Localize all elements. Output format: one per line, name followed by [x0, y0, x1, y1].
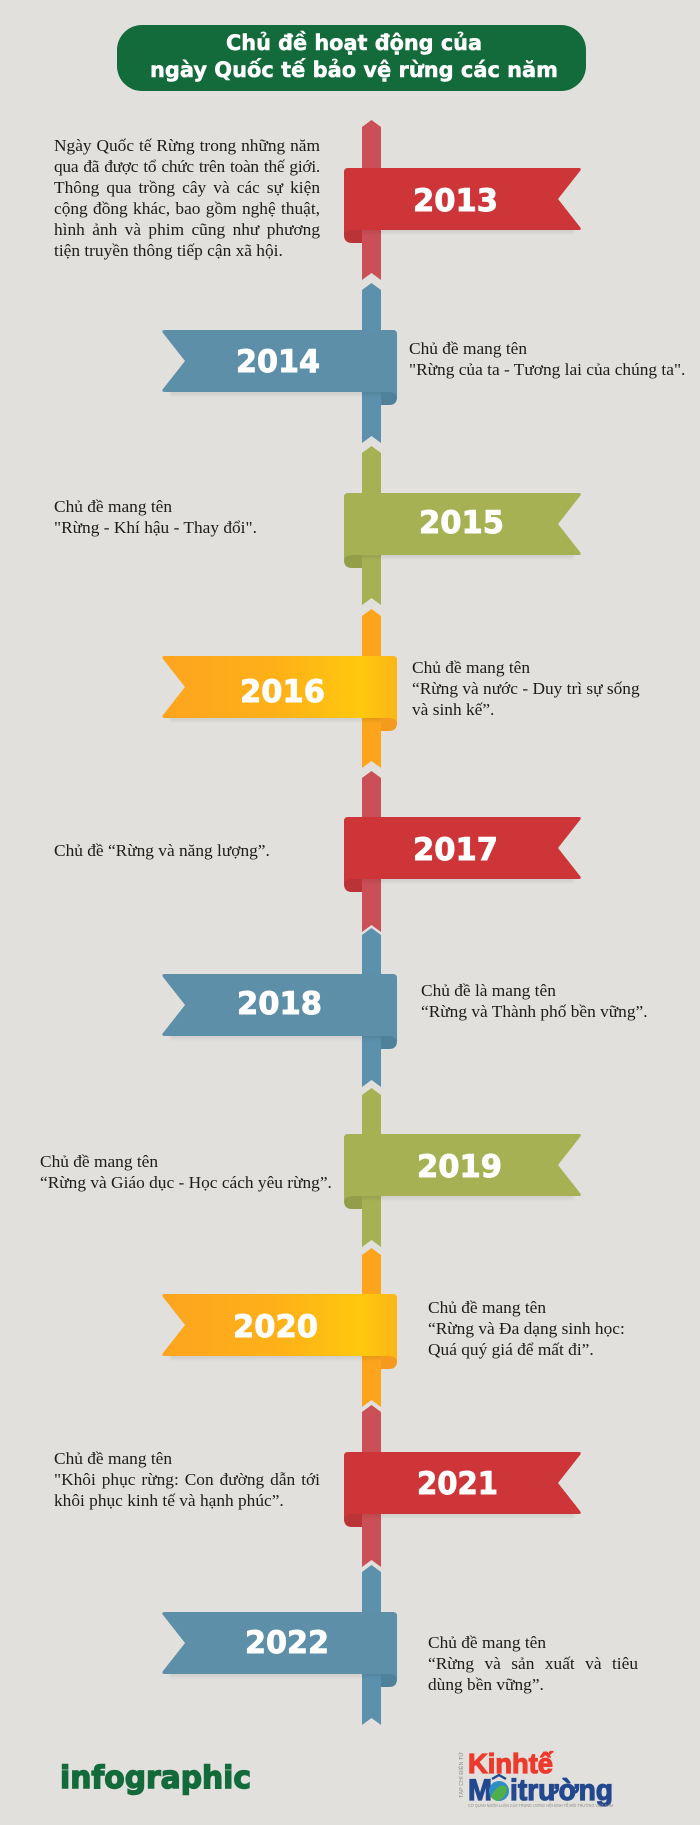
ribbon 2015: [344, 446, 581, 605]
text: theme 2022: Chủ đề mang tên: [428, 1633, 546, 1652]
text: introduction: Ngày Quốc tế Rừng trong những năm: [54, 136, 320, 155]
text: theme 2021: Chủ đề mang tên: [54, 1449, 172, 1468]
title banner: ngày Quốc tế bảo vệ rừng các năm: [150, 58, 558, 82]
logo: Kinh tế Môi trường: itrường: [510, 1774, 613, 1807]
ribbon 2013: [344, 120, 581, 280]
text: theme 2022: [428, 1633, 638, 1694]
logo: Kinh tế Môi trường: [457, 1748, 613, 1808]
text: theme 2017: Chủ đề “Rừng và năng lượng”.: [54, 841, 270, 860]
text: theme 2021: khôi phục kinh tế và hạnh phúc”.: [54, 1491, 284, 1510]
ribbon 2022: 2022: [245, 1625, 329, 1661]
text: theme 2019: [40, 1152, 332, 1192]
infographic wordmark: infographic: [60, 1760, 251, 1796]
ribbon 2020: 2020: [233, 1309, 318, 1345]
text: theme 2014: "Rừng của ta - Tương lai của chúng ta".: [409, 360, 685, 379]
ribbon 2020: [162, 1248, 397, 1407]
logo: Kinh tế Môi trường: TẠP CHÍ ĐIỆN TỬ: [457, 1751, 465, 1798]
text: introduction: tiện truyền thông tiếp cận xã hội.: [54, 241, 283, 260]
text: theme 2015: "Rừng - Khí hậu - Thay đổi".: [54, 518, 257, 537]
ribbon 2018: 2018: [237, 986, 322, 1022]
logo: Kinh tế Môi trường: CƠ QUAN NGÔN LUẬN CỦA TRUNG ƯƠNG HỘI KINH TẾ MÔI TRƯỜNG VIỆT NAM: [468, 1803, 613, 1808]
ribbon 2016: 2016: [240, 674, 325, 710]
text: introduction: cộng đồng khác, bao gồm nghệ thuật,: [54, 199, 320, 218]
text: theme 2014: [409, 339, 685, 379]
ribbon 2014: 2014: [236, 344, 320, 380]
text: theme 2016: và sinh kế”.: [412, 700, 494, 719]
ribbon 2021: 2021: [417, 1466, 498, 1502]
text: theme 2021: [54, 1449, 320, 1510]
text: theme 2022: dùng bền vững”.: [428, 1675, 544, 1694]
text: introduction: qua đã được tổ chức trên toàn thế giới.: [54, 157, 320, 176]
logo: Kinh tế Môi trường: Kinhtế: [468, 1748, 553, 1779]
text: theme 2020: “Rừng và Đa dạng sinh học:: [428, 1319, 625, 1338]
text: theme 2020: Quá quý giá để mất đi”.: [428, 1340, 594, 1359]
ribbon 2017: 2017: [413, 832, 498, 868]
ribbon 2014: [162, 283, 397, 443]
text: theme 2016: Chủ đề mang tên: [412, 658, 530, 677]
text: theme 2016: [412, 658, 640, 719]
text: theme 2015: [54, 497, 257, 537]
text: theme 2022: “Rừng và sản xuất và tiêu: [428, 1654, 638, 1673]
ribbon 2019: [344, 1088, 581, 1247]
ribbon 2019: 2019: [417, 1149, 502, 1185]
logo: Kinh tế Môi trường: M: [468, 1774, 492, 1807]
text: theme 2019: “Rừng và Giáo dục - Học cách yêu rừng”.: [40, 1173, 332, 1192]
title banner: [117, 25, 586, 91]
text: theme 2018: [421, 981, 648, 1021]
text: theme 2018: “Rừng và Thành phố bền vững”.: [421, 1002, 648, 1021]
ribbon 2017: [344, 771, 581, 932]
ribbon 2018: [162, 928, 397, 1087]
text: theme 2016: “Rừng và nước - Duy trì sự sống: [412, 679, 640, 698]
text: introduction: hình ảnh và phim cũng như phương: [54, 220, 320, 239]
text: theme 2021: "Khôi phục rừng: Con đường dẫn tới: [54, 1470, 320, 1489]
ribbon 2021: [344, 1405, 581, 1567]
text: introduction: Thông qua trồng cây và các sự kiện: [54, 178, 320, 197]
ribbon 2016: [162, 609, 397, 768]
text: theme 2019: Chủ đề mang tên: [40, 1152, 158, 1171]
text: theme 2020: Chủ đề mang tên: [428, 1298, 546, 1317]
text: theme 2015: Chủ đề mang tên: [54, 497, 172, 516]
text: theme 2018: Chủ đề là mang tên: [421, 981, 556, 1000]
ribbon 2022: [162, 1565, 397, 1725]
ribbon 2013: 2013: [413, 183, 498, 219]
text: theme 2020: [428, 1298, 625, 1359]
text: theme 2014: Chủ đề mang tên: [409, 339, 527, 358]
title banner: Chủ đề hoạt động của: [226, 31, 482, 55]
ribbon 2015: 2015: [419, 505, 504, 541]
text: introduction: [54, 136, 320, 260]
